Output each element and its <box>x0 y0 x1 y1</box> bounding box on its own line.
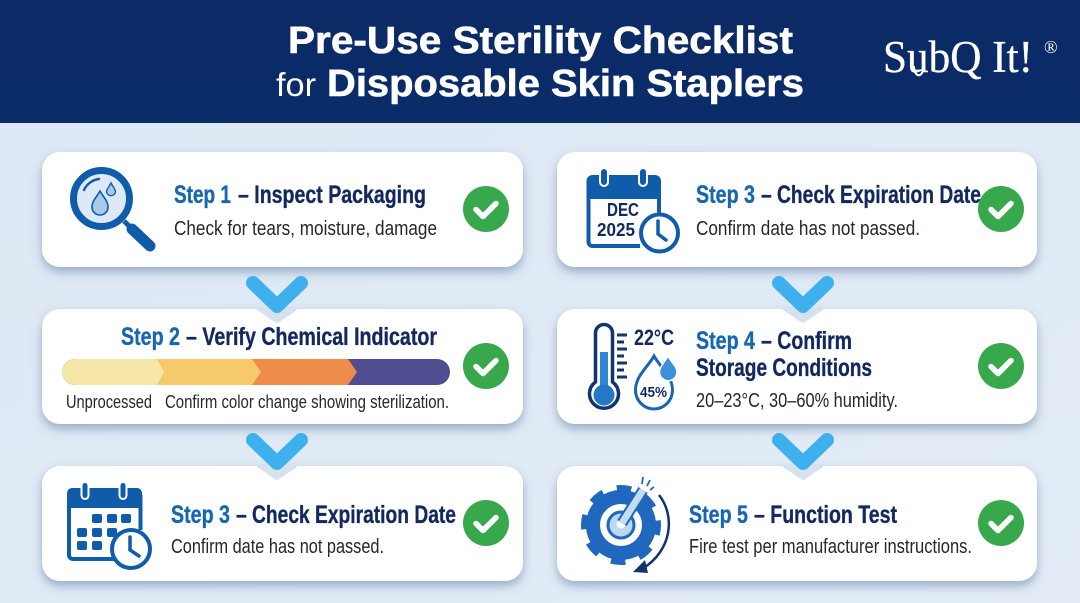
step 3 heading: – Check Expiration Date <box>236 501 456 529</box>
icon: calendar with clock <box>67 482 150 568</box>
icon: magnifying glass with droplets <box>74 170 150 246</box>
panel: step 4 confirm storage conditions <box>557 309 1037 424</box>
panel: step 2 verify chemical indicator <box>42 309 523 424</box>
step 2 heading: Step 2 <box>121 323 180 351</box>
step 4 heading: Storage Conditions <box>696 354 872 382</box>
step 4 description: 20–23°C, 30–60% humidity. <box>696 390 898 412</box>
step 1 description: Check for tears, moisture, damage <box>174 218 437 240</box>
header band <box>0 0 1080 123</box>
icon: thermometer and humidity drop: 45% <box>640 384 667 401</box>
step 3 description: Confirm date has not passed. <box>171 536 384 558</box>
step 1 heading: – Inspect Packaging <box>238 181 426 209</box>
title: Pre-Use Sterility Checklist <box>288 20 793 62</box>
panel: step 3 check expiration date (left) <box>42 466 523 581</box>
icon: green check <box>978 343 1024 389</box>
step 4 heading <box>696 327 872 382</box>
icon: calendar DEC 2025 with clock <box>586 168 678 252</box>
icon: green check <box>978 500 1024 546</box>
chemical indicator colour bar <box>62 359 450 385</box>
icon: green check <box>463 186 509 232</box>
arrow: step 3 to step 4 <box>779 283 827 321</box>
indicator labels: Unprocessed <box>66 392 152 412</box>
step 1 heading <box>174 181 426 209</box>
step 2 heading: – Verify Chemical Indicator <box>186 323 437 351</box>
step 2 heading <box>121 323 437 351</box>
step 3 description: Confirm date has not passed. <box>696 218 920 240</box>
arrow: step 1 to step 2 <box>253 283 301 321</box>
icon: calendar DEC 2025 with clock: DEC <box>607 200 639 220</box>
step 3 heading: – Check Expiration Date <box>761 181 981 209</box>
step 5 heading <box>689 501 898 529</box>
step 5 description: Fire test per manufacturer instructions. <box>689 536 972 558</box>
icon: calendar DEC 2025 with clock: 2025 <box>597 220 635 240</box>
step 4 heading: Step 4 <box>696 327 755 355</box>
logo: SubQ It!: SubQ It! <box>883 32 1033 82</box>
step 3 heading <box>171 501 456 529</box>
panel: step 3 check expiration date (right) <box>557 152 1037 267</box>
icon: thermometer and humidity drop <box>590 324 677 409</box>
step 3 heading: Step 3 <box>696 181 755 209</box>
arrow: step 2 to step 3 <box>253 440 301 478</box>
icon: green check <box>978 186 1024 232</box>
step 3 heading: Step 3 <box>171 501 230 529</box>
icon: green check <box>463 343 509 389</box>
logo: SubQ It!: ® <box>1044 37 1058 57</box>
title: for <box>276 66 316 103</box>
title <box>276 20 804 105</box>
step 1 heading: Step 1 <box>174 181 231 209</box>
icon: green check <box>463 500 509 546</box>
step 4 heading: – Confirm <box>761 327 852 355</box>
step 5 heading: – Function Test <box>754 501 898 529</box>
step 5 heading: Step 5 <box>689 501 748 529</box>
step 3 heading <box>696 181 981 209</box>
panel: step 5 function test <box>557 466 1037 581</box>
indicator labels: Confirm color change showing sterilization. <box>165 392 449 412</box>
indicator labels <box>66 392 449 412</box>
arrow: step 4 to step 5 <box>779 440 827 478</box>
panel: step 1 inspect packaging <box>42 152 523 267</box>
title: Disposable Skin Staplers <box>327 63 804 105</box>
icon: thermometer and humidity drop: 22°C <box>634 325 674 350</box>
icon: gear with stapler and rotation arrow <box>581 477 669 573</box>
